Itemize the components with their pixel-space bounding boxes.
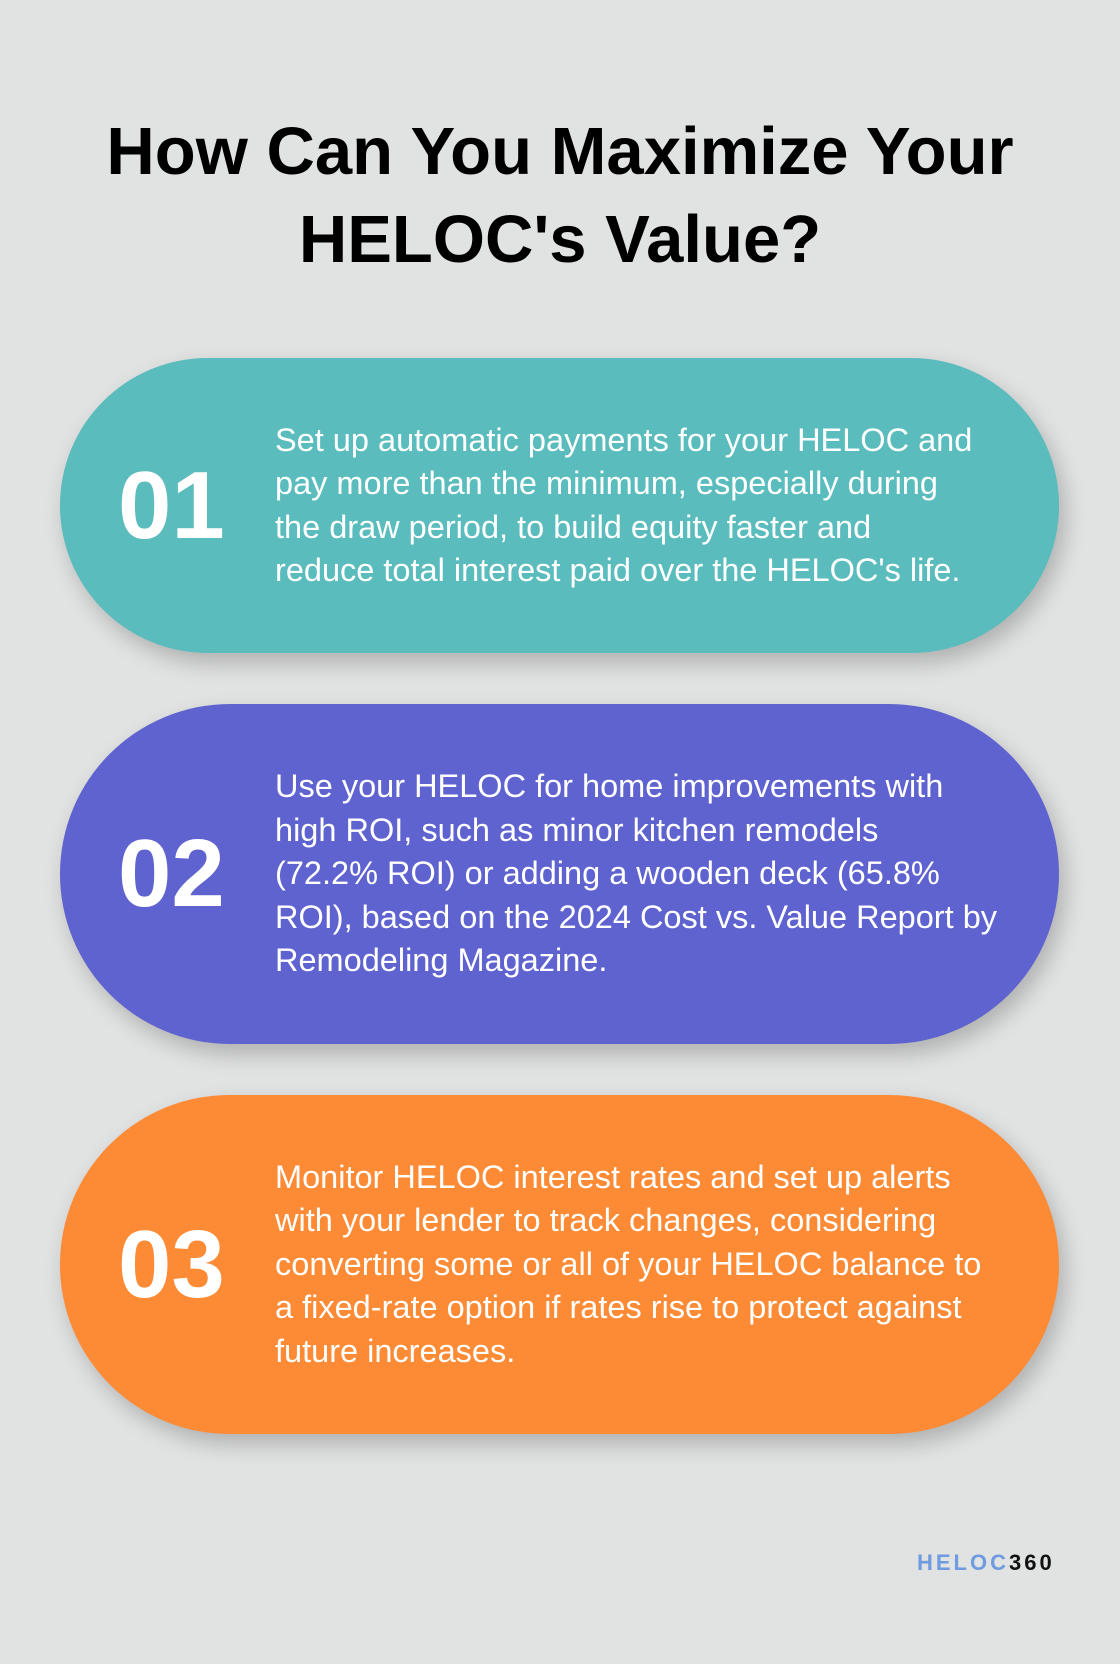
text 01: Set up automatic payments for your HELOC and [275,421,972,457]
text 03: a fixed-rate option if rates rise to protect against [275,1289,961,1325]
text 03: converting some or all of your HELOC balance to [275,1246,981,1282]
text 02: Use your HELOC for home improvements with [275,768,943,804]
text 01 [275,421,972,588]
logo: HELOC360 [917,1550,1055,1575]
text 03: future increases. [275,1333,515,1369]
text 01: pay more than the minimum, especially during [275,465,938,501]
number 02: 02 [118,820,225,927]
text 01: the draw period, to build equity faster and [275,508,871,544]
text 03: with your lender to track changes, considering [275,1202,936,1238]
text 01: reduce total interest paid over the HELOC's life. [275,552,960,588]
title: How Can You Maximize Your [106,114,1014,189]
text 02: (72.2% ROI) or adding a wooden deck (65.8% [275,855,940,891]
text 03 [275,1159,981,1369]
text 03: Monitor HELOC interest rates and set up alerts [275,1159,951,1195]
panel: tip 03 [60,1095,1059,1434]
text 02: Remodeling Magazine. [275,942,607,978]
text 02: ROI), based on the 2024 Cost vs. Value Report by [275,899,997,935]
number 03: 03 [118,1210,225,1318]
text 02: high ROI, such as minor kitchen remodels [275,812,878,848]
title: HELOC's Value? [299,202,821,277]
number 01: 01 [118,452,225,558]
panel: tip 01 [60,358,1059,653]
panel: tip 02 [60,704,1059,1044]
title [106,114,1014,277]
text 02 [275,768,997,978]
